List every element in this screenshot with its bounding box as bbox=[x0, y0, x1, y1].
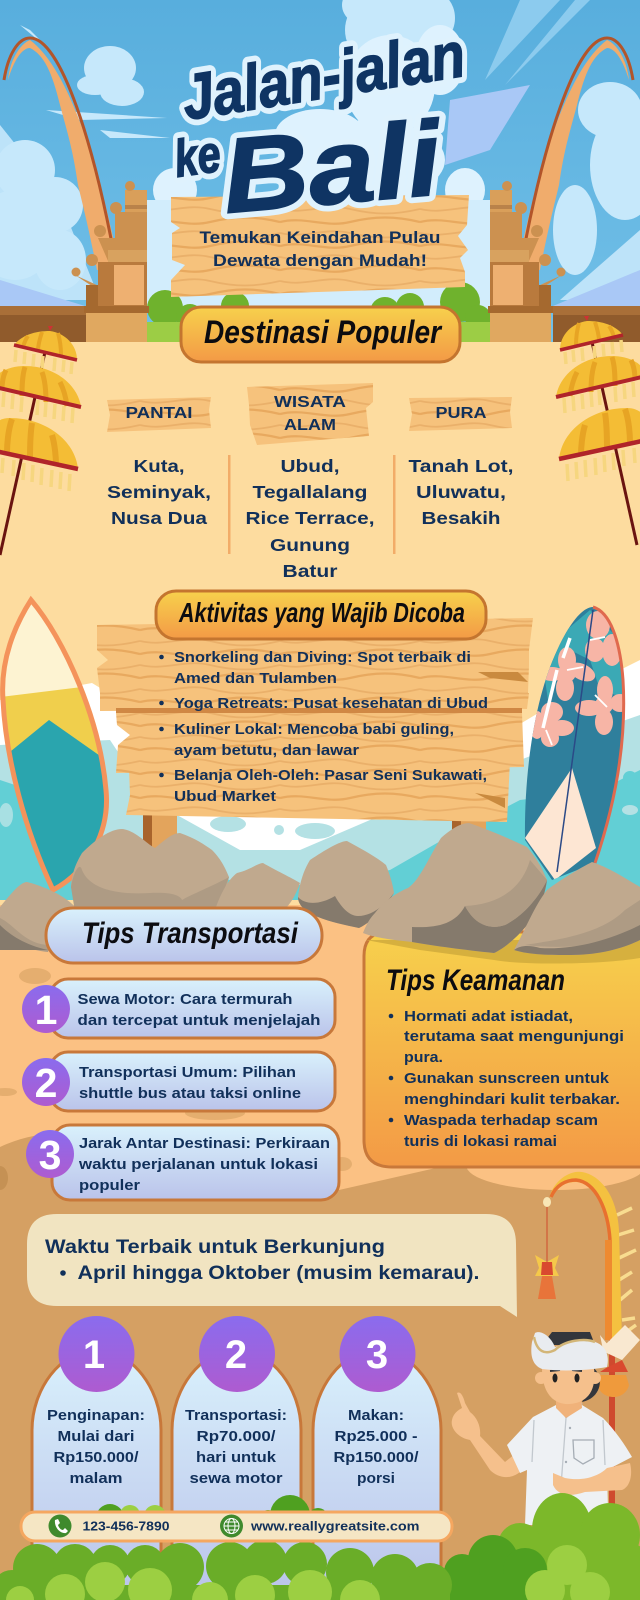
list: Pantai: Seminyak, bbox=[107, 482, 211, 502]
left gate and penjor bbox=[4, 38, 149, 342]
rocks bbox=[0, 823, 640, 955]
tab: Pura: PURA bbox=[436, 405, 486, 422]
subtitle text: Temukan Keindahan Pulau bbox=[200, 228, 440, 247]
sea bbox=[0, 660, 640, 900]
hair and turban bbox=[542, 1332, 595, 1345]
leaves bbox=[617, 1208, 636, 1335]
panel: tips keamanan bbox=[364, 932, 640, 1167]
panel: tips keamanan: Waspada terhadap scam bbox=[404, 1112, 598, 1129]
tab: Pura bbox=[409, 397, 512, 431]
tab: Wisata Alam: WISATA bbox=[274, 394, 346, 411]
contact bar: www.reallygreatsite.com bbox=[250, 1518, 420, 1534]
neck and head bbox=[556, 1392, 582, 1418]
activity list text: ayam betutu, dan lawar bbox=[174, 742, 359, 759]
destination lists bbox=[107, 455, 514, 581]
transport tip 3: Jarak Antar Destinasi: Perkiraan bbox=[79, 1135, 330, 1152]
cost card 2: 2 bbox=[225, 1333, 247, 1377]
activity list text: Yoga Retreats: Pusat kesehatan di Ubud bbox=[174, 695, 488, 712]
panel: tips keamanan: pura. bbox=[404, 1049, 443, 1066]
transport tip 2 bbox=[22, 1052, 335, 1111]
subtitle text: Dewata dengan Mudah! bbox=[213, 251, 427, 270]
list: Wisata Alam: Tegallalang bbox=[252, 482, 368, 502]
cost card 1 bbox=[32, 1316, 161, 1600]
cost card 2: sewa motor bbox=[190, 1470, 283, 1487]
heading pill: Tips Transportasi bbox=[46, 908, 322, 963]
background: lower sand bbox=[0, 905, 640, 1600]
speech bubble: best time to visit: April hingga Oktober (musim kemarau). bbox=[78, 1262, 480, 1284]
rock small middle bbox=[216, 863, 300, 912]
title: ke bbox=[171, 125, 224, 189]
tab: Pantai: PANTAI bbox=[126, 405, 192, 422]
list: Wisata Alam: Gunung bbox=[270, 535, 350, 555]
bushes behind banner bbox=[147, 282, 492, 344]
list: Wisata Alam: Rice Terrace, bbox=[246, 508, 374, 528]
transport tip 1: Sewa Motor: Cara termurah bbox=[78, 991, 292, 1008]
background: sand bbox=[0, 342, 640, 772]
list: Pura: Uluwatu, bbox=[416, 482, 506, 502]
transport tip 3: populer bbox=[79, 1177, 140, 1194]
transport tip 3: waktu perjalanan untuk lokasi bbox=[78, 1156, 318, 1173]
activity list text: Belanja Oleh-Oleh: Pasar Seni Sukawati, bbox=[174, 767, 487, 784]
title: Bali bbox=[218, 99, 448, 236]
cost card 1: Rp150.000/ bbox=[54, 1449, 139, 1466]
activity list text bbox=[159, 649, 488, 805]
title: ke bbox=[171, 125, 224, 189]
transport tip 1 bbox=[22, 979, 335, 1038]
list: Pantai: Kuta, bbox=[134, 456, 184, 476]
list: Wisata Alam bbox=[246, 456, 374, 581]
flowers bbox=[532, 611, 622, 747]
speech bubble: best time to visit bbox=[27, 1214, 517, 1317]
bushes: bottom bbox=[0, 1493, 640, 1600]
transport tip 2: 2 bbox=[35, 1060, 57, 1106]
rock far left bbox=[0, 882, 75, 952]
list: Pantai: Nusa Dua bbox=[111, 508, 207, 528]
cost card 3: Makan: bbox=[348, 1407, 404, 1424]
character: Balinese man bbox=[452, 1332, 632, 1525]
cost card 3: 3 bbox=[366, 1333, 388, 1377]
panel: tips keamanan: turis di lokasi ramai bbox=[404, 1133, 557, 1150]
contact bar bbox=[21, 1512, 452, 1541]
transport tip 1: 1 bbox=[35, 987, 57, 1033]
title: Jalan-jalan bbox=[177, 18, 470, 134]
pointing arm bbox=[452, 1392, 520, 1477]
icon: phone bbox=[48, 1514, 72, 1538]
subtitle text bbox=[200, 228, 440, 270]
umbrellas left bbox=[0, 326, 81, 555]
heading pill: Tips Transportasi: Tips Transportasi bbox=[82, 917, 299, 950]
cost card 2: hari untuk bbox=[196, 1449, 277, 1466]
rock large right bbox=[363, 823, 547, 953]
title: Bali bbox=[218, 99, 448, 236]
right gate and penjor bbox=[488, 38, 633, 342]
cost card 2: Transportasi: bbox=[185, 1407, 287, 1424]
activity list text: Amed dan Tulamben bbox=[174, 670, 337, 687]
lower arm bbox=[553, 1463, 631, 1495]
cost card 1: 1 bbox=[83, 1333, 105, 1377]
heading pill: Aktivitas: Aktivitas yang Wajib Dicoba bbox=[178, 597, 465, 628]
planks bbox=[97, 618, 533, 822]
tab: Wisata Alam: ALAM bbox=[284, 417, 336, 434]
shirt bbox=[507, 1405, 632, 1525]
transport tip 2: shuttle bus atau taksi online bbox=[79, 1085, 301, 1102]
clouds bbox=[0, 0, 640, 310]
rock pair behind pill bbox=[71, 829, 229, 912]
cost card 3: Rp25.000 - bbox=[334, 1428, 418, 1445]
heading pill: Aktivitas bbox=[156, 591, 486, 639]
activity list text: Ubud Market bbox=[174, 788, 276, 805]
cost card 1: malam bbox=[70, 1470, 122, 1487]
list: Pura: Tanah Lot, bbox=[408, 456, 514, 476]
background: sky bbox=[0, 0, 640, 345]
activity list text: Snorkeling dan Diving: Spot terbaik di bbox=[174, 649, 471, 666]
rock centre bbox=[298, 841, 394, 928]
cost card 3: porsi bbox=[357, 1470, 395, 1487]
list: Wisata Alam: Batur bbox=[282, 561, 338, 581]
cost card 2 bbox=[172, 1316, 301, 1600]
offering bbox=[598, 1325, 640, 1397]
transport tip 3: 3 bbox=[39, 1132, 61, 1178]
panel: tips keamanan: terutama saat mengunjungi bbox=[404, 1028, 624, 1045]
cost card 1: Mulai dari bbox=[58, 1428, 134, 1445]
surfboard left bbox=[0, 596, 110, 892]
rock far right bbox=[514, 862, 640, 955]
cost card 3 bbox=[313, 1316, 441, 1600]
wall bbox=[0, 306, 640, 342]
activity list text: Kuliner Lokal: Mencoba babi guling, bbox=[174, 721, 454, 738]
hanging ornament bbox=[535, 1197, 559, 1299]
speech bubble: best time to visit: Waktu Terbaik untuk Berkunjung bbox=[45, 1236, 385, 1258]
panel: tips keamanan: menghindari kulit terbakar. bbox=[404, 1091, 620, 1108]
list: Wisata Alam: Ubud, bbox=[280, 456, 340, 476]
icon: globe bbox=[220, 1514, 243, 1538]
cost card 1: Penginapan: bbox=[47, 1407, 145, 1424]
list: Pantai bbox=[107, 456, 211, 528]
contact bar: 123-456-7890 bbox=[82, 1518, 170, 1534]
tab: Wisata Alam bbox=[247, 383, 373, 445]
cost card 3: Rp150.000/ bbox=[334, 1449, 419, 1466]
panel: tips keamanan: Gunakan sunscreen untuk bbox=[404, 1070, 610, 1087]
category tabs bbox=[107, 383, 512, 445]
title: Jalan-jalan bbox=[177, 18, 470, 134]
transport tip 3 bbox=[26, 1125, 339, 1200]
bush tops behind contact bar bbox=[96, 1495, 328, 1535]
cost card 2: Rp70.000/ bbox=[196, 1428, 276, 1445]
sign posts bbox=[143, 815, 486, 855]
heading pill: Destinasi Populer: Destinasi Populer bbox=[204, 314, 442, 350]
umbrellas right bbox=[556, 316, 640, 545]
left bush mass bbox=[0, 1540, 452, 1600]
panel: tips keamanan: Hormati adat istiadat, bbox=[404, 1008, 573, 1025]
list: Pura bbox=[408, 456, 514, 528]
transport tip 2: Transportasi Umum: Pilihan bbox=[79, 1064, 296, 1081]
wooden sign: subtitle bbox=[171, 195, 469, 297]
penjor small with ornaments bbox=[535, 1172, 640, 1505]
surfboard right bbox=[524, 606, 626, 880]
tab: Pantai bbox=[107, 397, 211, 432]
title bbox=[171, 18, 470, 236]
list: Pura: Besakih bbox=[422, 508, 500, 528]
heading pill: Destinasi Populer bbox=[181, 307, 460, 362]
transport tip 1: dan tercepat untuk menjelajah bbox=[78, 1012, 320, 1029]
wooden sign: activities bbox=[97, 618, 533, 855]
panel: tips keamanan: Tips Keamanan bbox=[386, 964, 565, 997]
right bush bbox=[498, 1493, 640, 1600]
